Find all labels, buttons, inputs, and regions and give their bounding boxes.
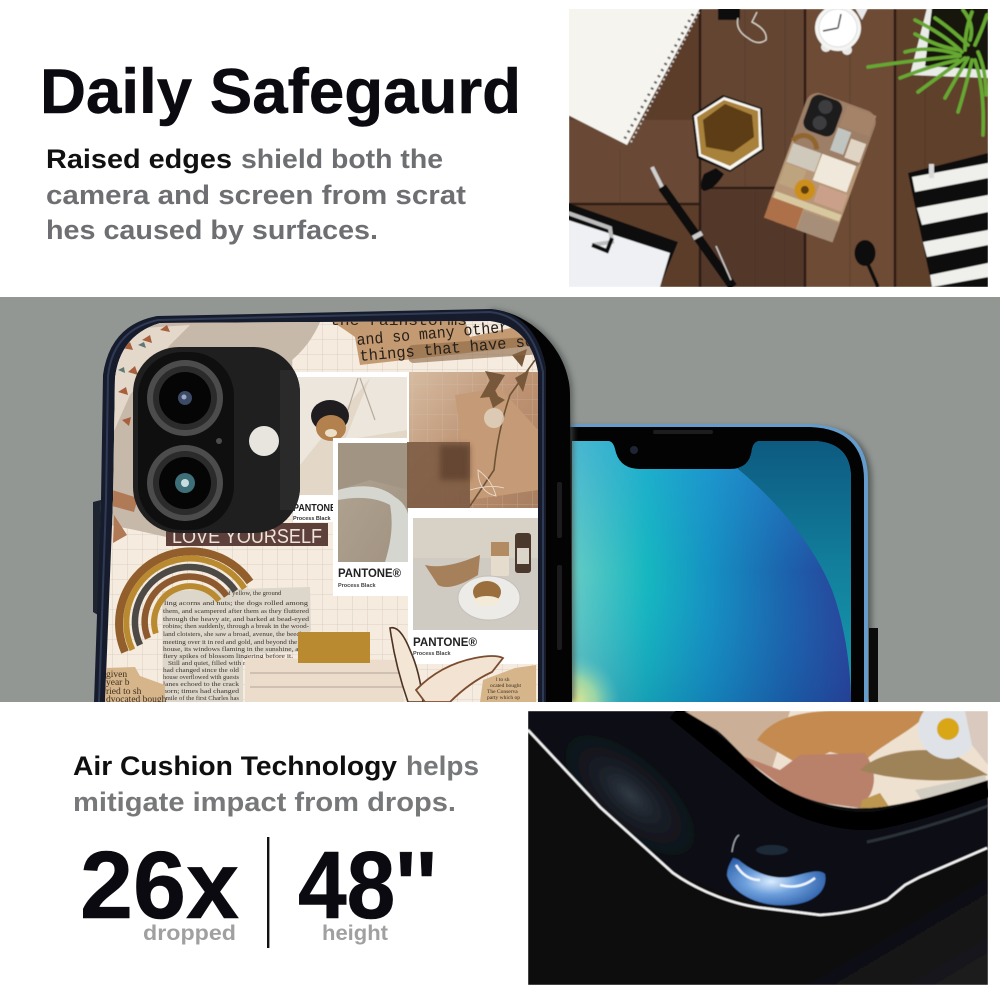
torn text scrap: right	[480, 665, 536, 702]
polaroid: bear in hammock: PANTONE	[293, 502, 336, 514]
tape note: typewriter quote: things that have so	[359, 333, 535, 366]
photo: phone case on wooden desk	[568, 5, 988, 287]
icon: flash	[249, 426, 279, 456]
tape note: typewriter quote: the rainstorms	[330, 313, 467, 330]
collage artwork	[100, 309, 545, 705]
text block: raised edges description	[46, 144, 466, 245]
icon: binder clip and wire	[718, 8, 766, 43]
newspaper clipping: had changed since the old	[163, 667, 240, 674]
icon: lower lens	[147, 445, 223, 521]
newspaper clipping	[162, 587, 311, 702]
polaroid: beach: Process Black	[338, 583, 377, 589]
text block: raised edges description: hes caused by surfaces.	[46, 215, 378, 245]
icon: air cushion bubble	[727, 827, 825, 905]
newspaper clipping: them, and scampered after them as they fluttered	[163, 608, 310, 615]
icon: coffee cup	[692, 95, 764, 191]
icon: potted plant	[868, 8, 988, 135]
icon: pen	[652, 167, 733, 287]
white edge highlight	[528, 730, 987, 915]
panel: grey product band	[0, 297, 1000, 702]
screen wallpaper	[572, 441, 851, 702]
torn text scrap: left: year b	[106, 678, 130, 688]
lined paper and gold tape	[245, 632, 404, 702]
icon: black spoon	[854, 240, 878, 287]
collage corner	[684, 711, 988, 810]
divider	[267, 837, 269, 948]
newspaper clipping: house overflowed with guests	[163, 674, 239, 681]
icon: camera module	[133, 347, 300, 533]
icon: upper lens	[147, 360, 223, 436]
icon: striped notebook	[908, 153, 988, 287]
icon: alarm clock	[815, 5, 868, 55]
tape note: typewriter quote	[332, 321, 533, 365]
butterfly sticker	[390, 628, 503, 702]
polaroid: bear in hammock: Process Black	[293, 516, 332, 522]
phone: front screen view	[560, 424, 878, 702]
newspaper clipping: land cloisters, she saw a broad, avenue, the beeches	[163, 631, 309, 638]
title: Daily Safegaurd	[40, 57, 521, 127]
text block: raised edges description: camera and screen from scrat	[46, 180, 466, 210]
stat: 48 inches height: height	[322, 922, 388, 945]
phone case: back view with collage	[93, 309, 575, 705]
polaroid: breakfast table: Process Black	[413, 651, 452, 657]
newspaper clipping: robins; then suddenly, through a break in the wood-	[163, 623, 309, 630]
newspaper clipping: meeting over it in red and gold, and beyond the old	[163, 639, 309, 646]
icon: clipboard	[568, 203, 678, 287]
torn text scrap: right: l to sh	[496, 677, 510, 683]
torn text scrap: left: ried to sh	[106, 687, 142, 697]
torn text scrap: right: party which op	[487, 695, 520, 701]
torn text scrap: right: ocated bought	[490, 683, 521, 689]
newspaper clipping: of yellow, the ground	[225, 590, 282, 597]
newspaper clipping: Still and quiet, filled with repose it looked; th	[168, 660, 299, 667]
torn floral paper	[110, 322, 320, 543]
text block: air cushion technology: Air Cushion Technology	[73, 751, 397, 781]
icon: microphone dot	[216, 438, 222, 444]
stat: 26x dropped: 26x	[80, 832, 239, 939]
torn text scrap: left: dvocated bough	[106, 695, 167, 705]
newspaper clipping: ling acorns and nuts; the dogs rolled among	[164, 600, 309, 607]
newspaper clipping: lanes echoed to the crack	[163, 681, 240, 688]
polaroid: breakfast table: PANTONE®	[413, 637, 478, 649]
icon: speaker grille	[653, 430, 713, 434]
newspaper clipping: house, its windows flaming in the sunshine, and	[163, 646, 307, 653]
torn text scrap: left	[105, 667, 167, 705]
text block: raised edges description: shield both the	[241, 144, 443, 174]
icon: phone with collage case	[764, 90, 879, 243]
text block: air cushion technology: mitigate impact from drops.	[73, 787, 456, 817]
stat: 26x dropped: dropped	[143, 922, 236, 945]
transparent brown film	[407, 442, 470, 508]
polaroid: bear in hammock	[293, 372, 409, 522]
tape note: typewriter quote: and so many other	[356, 319, 509, 350]
text block: air cushion technology	[73, 751, 479, 817]
newspaper clipping: fiery spikes of blossom lingering before it.	[163, 653, 293, 660]
rainbow sticker	[119, 551, 250, 652]
newspaper clipping: horn; times had changed	[163, 688, 240, 695]
text block: air cushion technology: helps	[406, 751, 479, 781]
bumper body	[528, 711, 988, 915]
icon: front camera in notch	[630, 446, 638, 454]
icon: spiral notebook	[568, 8, 700, 145]
text block: raised edges description: Raised edges	[46, 144, 232, 174]
banner: love yourself: LOVE YOURSELF	[172, 526, 322, 548]
kraft paper with dried plant	[407, 349, 538, 518]
newspaper clipping: through the heavy air, and barked at bead-eyed	[163, 616, 310, 623]
torn text scrap: left: given	[106, 670, 127, 680]
torn text scrap: right: The Conserva	[487, 689, 518, 695]
polaroid: beach	[333, 438, 409, 596]
polaroid: breakfast table	[408, 508, 539, 664]
photo: air cushion corner close-up	[528, 699, 990, 985]
polaroid: beach: PANTONE®	[338, 568, 402, 580]
stat: 48 inches height: 48''	[298, 832, 437, 939]
newspaper clipping: smile of the first Charles has	[163, 695, 239, 702]
